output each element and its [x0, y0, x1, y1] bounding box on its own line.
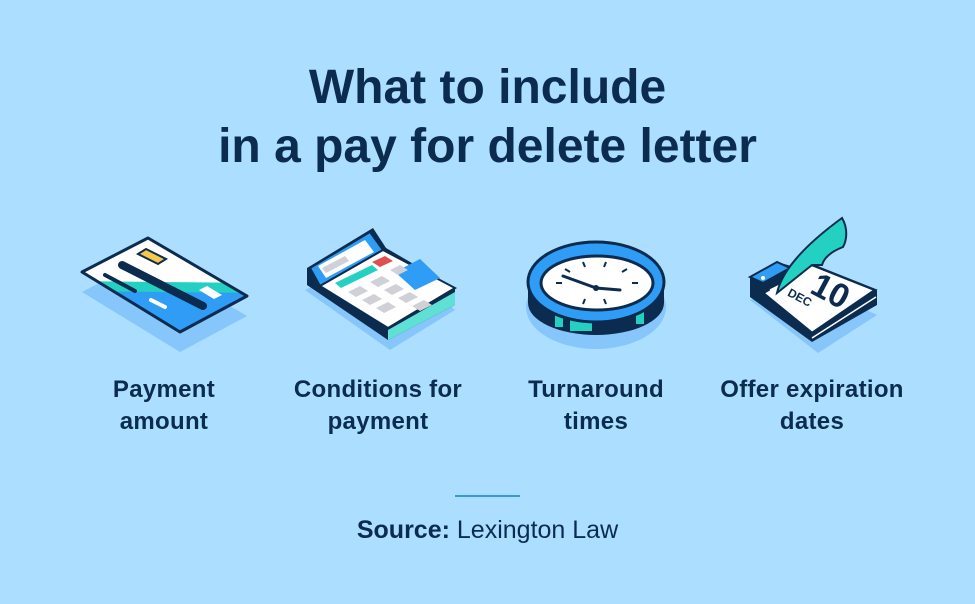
title: in a pay for delete letter	[218, 120, 757, 173]
icon: calendar: DEC	[785, 285, 815, 310]
icon: calculator	[305, 228, 455, 350]
label: turnaround times: times	[564, 408, 628, 435]
label: conditions for payment	[294, 376, 462, 435]
label: payment amount: amount	[120, 408, 208, 435]
icon: clock	[526, 242, 666, 349]
label: offer expiration dates: Offer expiration	[720, 376, 904, 403]
label: turnaround times	[528, 376, 664, 435]
icon: calendar	[750, 218, 877, 353]
label: conditions for payment: payment	[328, 408, 428, 435]
label: payment amount: Payment	[113, 376, 215, 403]
label: payment amount	[113, 376, 215, 435]
label: conditions for payment: Conditions for	[294, 376, 462, 403]
icon: credit card	[80, 236, 249, 352]
icons	[80, 216, 878, 353]
icon: calendar: 10	[805, 266, 856, 317]
title: What to include	[309, 61, 666, 114]
label: turnaround times: Turnaround	[528, 376, 664, 403]
title	[218, 61, 757, 173]
label: offer expiration dates	[720, 376, 904, 435]
label: offer expiration dates: dates	[780, 408, 844, 435]
source: Source: Lexington Law	[357, 516, 618, 544]
